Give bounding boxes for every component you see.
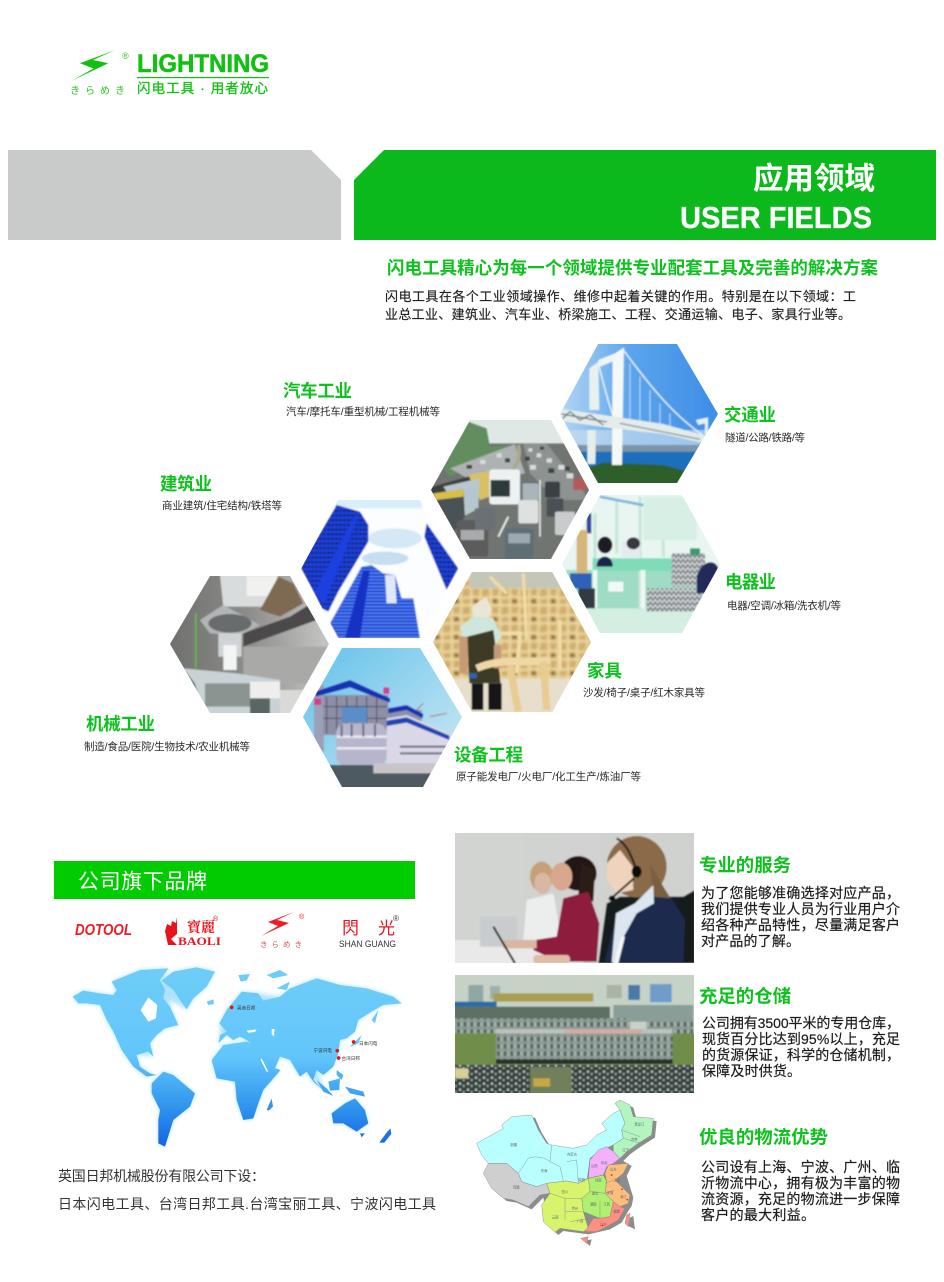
logistics markers: [601, 1174, 628, 1226]
logo: BAOLI: ®: [213, 915, 219, 923]
brand logos row: [75, 912, 399, 949]
logo: SHAN GUANG: [339, 914, 399, 949]
block: 优良的物流优势: 公司设有上海、宁波、广州、临: [701, 1159, 900, 1175]
label: 电器业: [725, 572, 842, 612]
province names: 江苏: [613, 1178, 621, 1183]
logo: BAOLI: [165, 915, 222, 948]
heading: 应用领域: 应用领域: [753, 162, 875, 196]
map labels: 日本闪电: [359, 1040, 378, 1047]
label: 家具: [583, 661, 706, 699]
province names: 湖北: [592, 1191, 599, 1196]
hexagon photo: power plant: [300, 645, 465, 790]
block: 专业的服务: 为了您能够准确选择对应产品，: [701, 885, 900, 901]
province names: 青海: [541, 1168, 548, 1173]
label: 汽车工业: 汽车工业: [283, 381, 352, 401]
block: 专业的服务: 专业的服务: [699, 854, 791, 876]
hexagon photo: furniture workshop: [427, 570, 593, 713]
subheading: 闪电工具精心为每一个领域提供专业配套工具及完善的解决方案: [387, 258, 878, 278]
logo: SHAN GUANG: ®: [393, 914, 399, 923]
subsidiaries text: 英国日邦机械股份有限公司下设：: [58, 1168, 265, 1184]
province names: 黑龙江: [634, 1122, 645, 1127]
province names: 山东: [610, 1166, 617, 1171]
block: 优良的物流优势: 优良的物流优势: [699, 1126, 828, 1148]
label: 汽车工业: 汽车/摩托车/重型机械/工程机械等: [286, 405, 440, 418]
photo: warehouse: [450, 972, 700, 1097]
province names: 辽宁: [622, 1147, 630, 1152]
hexagon photo: skyscrapers: [301, 500, 459, 638]
block: 充足的仓储: 充足的仓储: [699, 986, 791, 1006]
province names: 河北: [601, 1160, 608, 1165]
logo: LIGHTNING: LIGHTNING: [137, 50, 269, 78]
logo: SHAN GUANG: SHAN GUANG: [339, 939, 396, 949]
panel: grey header block: [8, 150, 341, 240]
logo: LIGHTNING: ®: [122, 51, 129, 61]
province names: 四川: [562, 1190, 568, 1194]
block: 优良的物流优势: 沂物流中心，拥有极为丰富的物: [701, 1175, 900, 1191]
label: 交通业: 隧道/公路/铁路/等: [725, 431, 806, 444]
province names: 广西: [577, 1218, 584, 1223]
label: 家具: 沙发/椅子/桌子/红木家具等: [583, 686, 706, 699]
panel: green header block: [354, 150, 936, 240]
label: 设备工程: [454, 745, 642, 783]
province names: 江西: [603, 1201, 611, 1206]
block: 专业的服务: 对产品的了解。: [701, 933, 800, 949]
label: 家具: 家具: [587, 661, 622, 681]
province names: 广东: [600, 1221, 607, 1226]
block: 充足的仓储: 的货源保证，科学的仓储机制，: [702, 1047, 900, 1063]
label: 交通业: 交通业: [724, 405, 776, 425]
logo: lightning red: ®: [299, 913, 305, 921]
map labels: 宁波闪电: [314, 1047, 332, 1054]
logo: LIGHTNING: きらめき: [70, 85, 125, 97]
intro text: 业总工业、建筑业、汽车业、桥梁施工、工程、交通运输、电子、家具行业等。: [385, 307, 851, 322]
label: 机械工业: 机械工业: [86, 714, 155, 734]
province names: 湖南: [590, 1201, 597, 1206]
province names: 浙江: [620, 1194, 627, 1199]
logo: BAOLI: 寶麗: [187, 919, 215, 936]
block: 专业的服务: 我们提供专业人员为行业用户介: [701, 901, 900, 917]
block: 优良的物流优势: [699, 1126, 900, 1223]
province names: 云南: [552, 1215, 559, 1220]
label: 电器业: 电器/空调/冰箱/洗衣机/等: [727, 599, 842, 612]
province names: 河南: [595, 1178, 602, 1183]
block: 专业的服务: 绍各种产品特性，尽量满足客户: [701, 917, 900, 933]
hexagon photo: machine tool: [167, 573, 333, 717]
logo: lightning red: きらめき: [260, 940, 302, 949]
province names: 新疆: [510, 1142, 518, 1147]
label: 建筑业: 建筑业: [160, 474, 212, 494]
map labels: 台湾日邦: [342, 1055, 360, 1062]
block: 充足的仓储: 保障及时供货。: [702, 1063, 801, 1079]
province names: 贵州: [572, 1206, 578, 1211]
continents: [73, 967, 402, 1147]
logo: SHAN GUANG: 光: [378, 919, 395, 938]
intro text: 闪电工具在各个工业领域操作、维修中起着关键的作用。特别是在以下领域：工: [385, 289, 856, 304]
logo: lightning red: [260, 912, 305, 949]
hexagon photo: electrical assembly: [558, 492, 723, 637]
map labels: 英商日邦: [237, 1004, 256, 1012]
block: 优良的物流优势: 客户的最大利益。: [701, 1207, 815, 1223]
provinces: [477, 1100, 653, 1243]
label: 交通业: [724, 405, 806, 444]
block: 充足的仓储: 现货百分比达到95%以上，充足: [702, 1031, 900, 1047]
province names: 陕西: [578, 1177, 586, 1182]
city markers: [230, 1005, 355, 1060]
map shadow: [480, 1103, 657, 1246]
logo: BAOLI: BAOLI: [178, 936, 222, 948]
label: 电器业: 电器业: [725, 572, 776, 592]
photo: customer service: [450, 830, 700, 967]
province names: 山西: [591, 1163, 598, 1168]
map glow: [73, 967, 402, 1147]
province names: 吉林: [631, 1137, 638, 1142]
label: 机械工业: [84, 714, 250, 753]
block: 充足的仓储: [699, 986, 900, 1079]
hexagon photo: bridge: [560, 344, 718, 483]
intro text: [385, 289, 856, 322]
hudson bay: [141, 997, 157, 1022]
inland seas: [247, 1029, 275, 1072]
block: 专业的服务: [699, 854, 900, 949]
province names: 内蒙古: [567, 1152, 578, 1157]
label: 汽车工业: [283, 381, 440, 418]
province names: 福建: [613, 1208, 621, 1213]
logo: SHAN GUANG: 閃: [342, 919, 359, 938]
logo: LIGHTNING: 闪电工具 · 用者放心: [137, 81, 268, 96]
China map: [477, 1100, 657, 1246]
label: 设备工程: 设备工程: [454, 745, 523, 765]
world map: [73, 967, 402, 1147]
label: 建筑业: [160, 474, 282, 512]
subsidiaries text: [58, 1168, 436, 1212]
label: 建筑业: 商业建筑/住宅结构/铁塔等: [162, 499, 282, 512]
panel: brand heading bar: 公司旗下品牌: [78, 870, 207, 894]
panel: brand heading bar: [54, 861, 415, 899]
block: 充足的仓储: 公司拥有3500平米的专用仓库，: [702, 1015, 900, 1031]
logo: DOTOOL: DOTOOL: [75, 922, 132, 939]
province names: 西藏: [513, 1184, 520, 1189]
label: 设备工程: 原子能发电厂/火电厂/化工生产/炼油厂等: [456, 770, 642, 783]
label: 机械工业: 制造/食品/医院/生物技术/农业机械等: [84, 740, 250, 753]
logo: LIGHTNING: [70, 50, 269, 97]
subsidiaries text: 日本闪电工具、台湾日邦工具.台湾宝丽工具、宁波闪电工具: [58, 1196, 436, 1212]
map labels: [237, 1004, 378, 1062]
block: 优良的物流优势: 流资源，充足的物流进一步保障: [701, 1191, 900, 1207]
province names: 安徽: [607, 1190, 614, 1195]
province names: [510, 1122, 645, 1226]
heading: USER FIELDS: USER FIELDS: [680, 200, 872, 235]
hexagon photo: traffic: [427, 418, 593, 562]
